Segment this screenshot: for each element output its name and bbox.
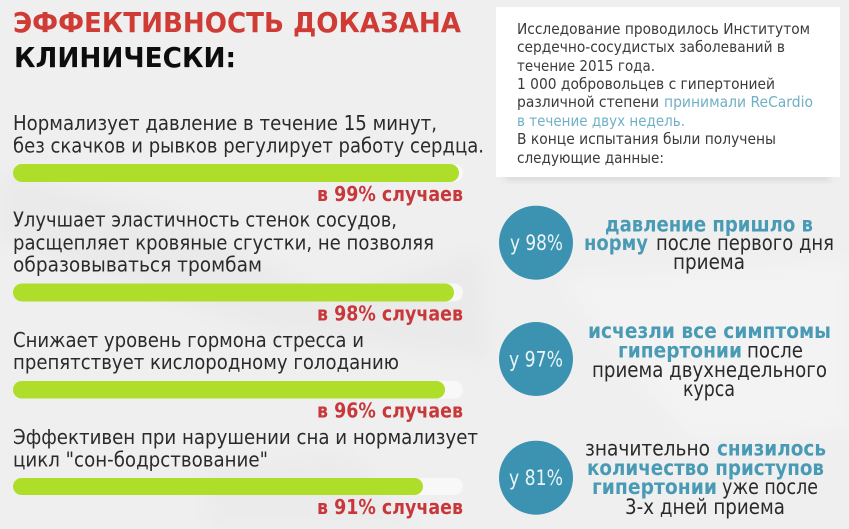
panel: study description: течение 2015 года.	[517, 57, 655, 75]
progress bar: 99%	[13, 164, 463, 182]
progress bar: 96%	[13, 381, 463, 398]
panel: study description: сердечно-сосудистых заболеваний в	[517, 38, 785, 56]
text block: benefit 3	[13, 328, 399, 374]
text block: benefit 2: расщепляет кровяные сгустки, не позволяя	[13, 230, 434, 254]
left column: clinical effectiveness	[13, 6, 484, 519]
text block: result 81%: гипертонии	[592, 475, 717, 499]
text block: result 81%: снизилось	[717, 437, 826, 461]
text block: benefit 2: Улучшает эластичность стенок сосудов,	[13, 208, 397, 232]
panel: study description: следующие данные:	[517, 149, 664, 167]
panel: study description: в течение двух недель.	[517, 112, 685, 130]
text block: result 97%: после	[747, 339, 803, 363]
label: 99% of cases: в 99% случаев	[317, 182, 463, 206]
text block: benefit 4: цикл "сон-бодрствование"	[13, 448, 268, 472]
label: 91% of cases: в 91% случаев	[317, 495, 463, 519]
badge: 98%: у 98%	[510, 231, 563, 255]
text block: benefit 1: без скачков и рывков регулирует работу сердца.	[13, 134, 484, 158]
panel: study description: различной степени	[517, 93, 659, 111]
text block: benefit 4	[13, 425, 478, 472]
label: 96% of cases: в 96% случаев	[317, 399, 463, 423]
badge: 81%: у 81%	[509, 466, 563, 490]
text block: result 98%	[584, 213, 834, 274]
badge: 97%	[499, 322, 573, 396]
label: 98% of cases: в 98% случаев	[317, 302, 463, 326]
text block: result 81%: значительно	[585, 437, 710, 461]
text block: benefit 1	[13, 111, 484, 158]
panel: study description: В конце испытания были получены	[517, 130, 776, 148]
title: ЭФФЕКТИВНОСТЬ ДОКАЗАНА	[13, 6, 461, 39]
text block: result 98%: приема	[673, 250, 745, 274]
badge: 97%: у 97%	[509, 348, 563, 372]
title	[13, 6, 461, 74]
text block: result 98%: давление пришло в	[605, 213, 813, 237]
panel: study description	[496, 7, 840, 180]
panel: study description: 1 000 добровольцев с гипертонией	[517, 75, 775, 93]
badge: 98%	[499, 206, 573, 280]
badge: 81%	[499, 441, 573, 515]
text block: benefit 3: Снижает уровень гормона стресса и	[13, 328, 364, 352]
text block: benefit 2: образовываться тромбам	[13, 253, 262, 277]
text block: benefit 3: препятствует кислородному голоданию	[13, 350, 399, 374]
progress bar: 98%	[13, 284, 463, 302]
text block: benefit 1: Нормализует давление в течение 15 минут,	[13, 111, 437, 135]
text block: result 97%	[588, 319, 831, 401]
text block: result 97%: курса	[683, 377, 735, 401]
text block: result 81%: уже после	[722, 475, 818, 499]
text block: benefit 4: Эффективен при нарушении сна и нормализует	[13, 425, 478, 449]
progress bar: 91%	[13, 478, 463, 495]
panel: study description: принимали ReCardio	[664, 93, 813, 111]
panel: study description: Исследование проводилось Институтом	[517, 20, 810, 38]
text block: result 81%	[585, 437, 826, 519]
text block: result 98%: норму	[584, 231, 648, 255]
text block: result 97%: гипертонии	[618, 339, 742, 363]
text block: benefit 2	[13, 208, 434, 277]
right column: study results	[496, 7, 840, 519]
text block: result 81%: 3-х дней приема	[625, 495, 785, 519]
title: КЛИНИЧЕСКИ:	[14, 41, 236, 74]
